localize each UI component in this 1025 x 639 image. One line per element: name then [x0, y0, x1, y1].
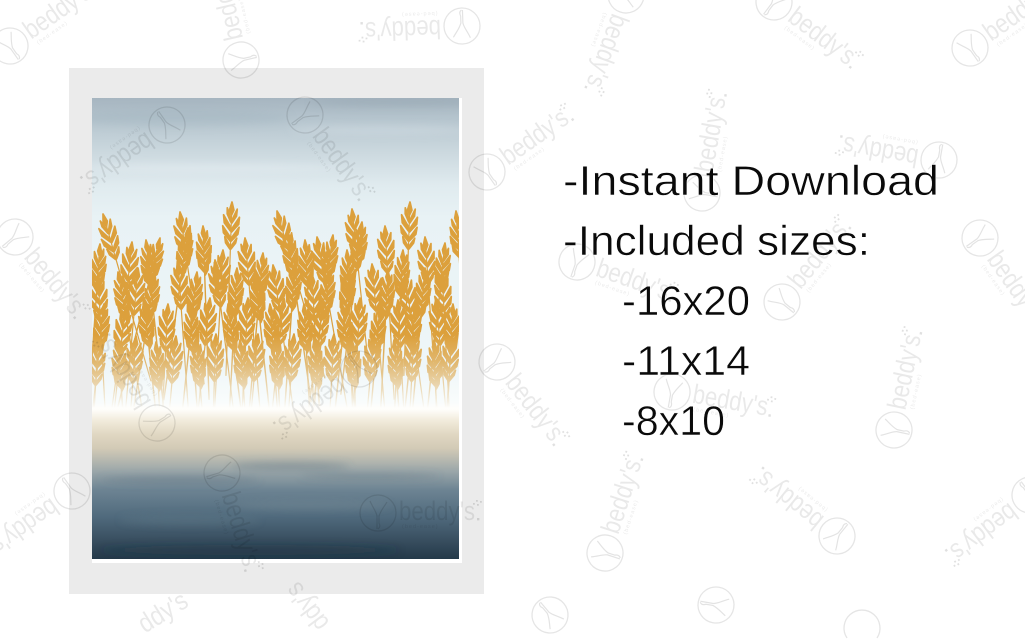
watermark pattern: beddy's logos: (bed-ease) — [971, 496, 1004, 523]
watermark pattern: beddy's logos: beddy's — [595, 455, 647, 537]
watermark pattern: beddy's logos: (bed-ease) — [134, 363, 159, 397]
watermark pattern: beddy's logos: beddy's — [80, 126, 160, 195]
text: size 11x14: -11x14 — [622, 337, 750, 384]
watermark pattern: beddy's logos: (bed-ease) — [717, 135, 729, 172]
watermark pattern: beddy's logos: (bed-ease) — [806, 262, 833, 294]
watermark pattern: beddy's logos: ddy's — [279, 577, 335, 637]
text: instant download: -Instant Download — [563, 157, 939, 204]
watermark pattern: beddy's logos: (bed-ease) — [513, 146, 546, 172]
watermark pattern: beddy's logos: (bed-ease) — [910, 373, 923, 410]
watermark pattern: beddy's logos: beddy's — [365, 14, 442, 46]
watermark pattern: beddy's logos: (bed-ease) — [36, 20, 69, 46]
watermark pattern: beddy's logos: beddy's — [307, 122, 376, 201]
watermark pattern: beddy's logos: (bed-ease) — [300, 369, 333, 396]
watermark pattern: beddy's logos: beddy's — [689, 95, 732, 175]
watermark pattern: beddy's logos: (bed-ease) — [108, 125, 141, 151]
watermark pattern: beddy's logos: (bed-ease) — [13, 491, 46, 517]
watermark pattern: beddy's logos: beddy's — [782, 216, 853, 294]
panel: white mat — [92, 98, 462, 563]
watermark pattern: beddy's logos: beddy's — [751, 465, 829, 536]
watermark pattern: beddy's logos: beddy's — [91, 334, 157, 414]
watermark pattern: beddy's logos: ddy's — [132, 585, 193, 639]
watermark pattern: beddy's logos: (bed-ease) — [797, 485, 829, 512]
watermark pattern: beddy's logos: beddy's — [841, 130, 921, 173]
watermark pattern: beddy's logos: beddy's — [399, 496, 475, 526]
watermark pattern: beddy's logos: beddy's — [690, 379, 770, 422]
watermark pattern: beddy's logos: (bed-ease) — [881, 133, 918, 145]
text block: product details — [563, 157, 939, 444]
watermark pattern: beddy's logos: (bed-ease) — [693, 407, 730, 419]
watermark pattern: beddy's logos: beddy's — [945, 497, 1023, 567]
watermark pattern: beddy's logos: (bed-ease) — [401, 10, 438, 17]
watermark pattern: beddy's logos: beddy's — [273, 371, 352, 440]
panel: grey frame — [69, 68, 484, 594]
watermark pattern: beddy's logos: beddy's — [593, 253, 674, 306]
watermark pattern: beddy's logos: beddy's — [500, 368, 570, 446]
text: size 16x20: -16x20 — [622, 277, 750, 324]
chart: wheat field illustration — [92, 201, 459, 406]
watermark pattern: beddy's logos: beddy's — [19, 242, 90, 320]
watermark pattern: beddy's logos: beddy's — [494, 102, 574, 171]
watermark pattern: beddy's logos: (bed-ease) — [589, 12, 607, 48]
watermark pattern: beddy's logos: (bed-ease) — [594, 280, 631, 298]
watermark pattern: beddy's logos: (bed-ease) — [498, 388, 526, 420]
watermark pattern: beddy's logos: beddy's — [581, 10, 635, 92]
watermark pattern: beddy's logos: beddy's — [882, 332, 927, 412]
text: size 8x10: -8x10 — [622, 397, 725, 444]
watermark pattern: beddy's logos: beddy's — [783, 1, 862, 71]
panel: painted artwork — [92, 98, 459, 559]
text: included sizes: -Included sizes: — [563, 217, 870, 264]
watermark pattern: beddy's logos: (bed-ease) — [980, 264, 1006, 297]
watermark pattern: beddy's logos: (bed-ease) — [213, 499, 229, 536]
watermark pattern: beddy's logos: (bed-ease) — [402, 524, 439, 530]
watermark pattern: beddy's logos: (bed-ease) — [305, 141, 332, 174]
watermark pattern: beddy's logos: (bed-ease) — [783, 25, 816, 52]
watermark pattern: beddy's logos: (bed-ease) — [17, 262, 46, 294]
watermark pattern: beddy's logos: (bed-ease) — [623, 499, 640, 535]
watermark pattern: beddy's logos: beddy's — [216, 488, 267, 570]
